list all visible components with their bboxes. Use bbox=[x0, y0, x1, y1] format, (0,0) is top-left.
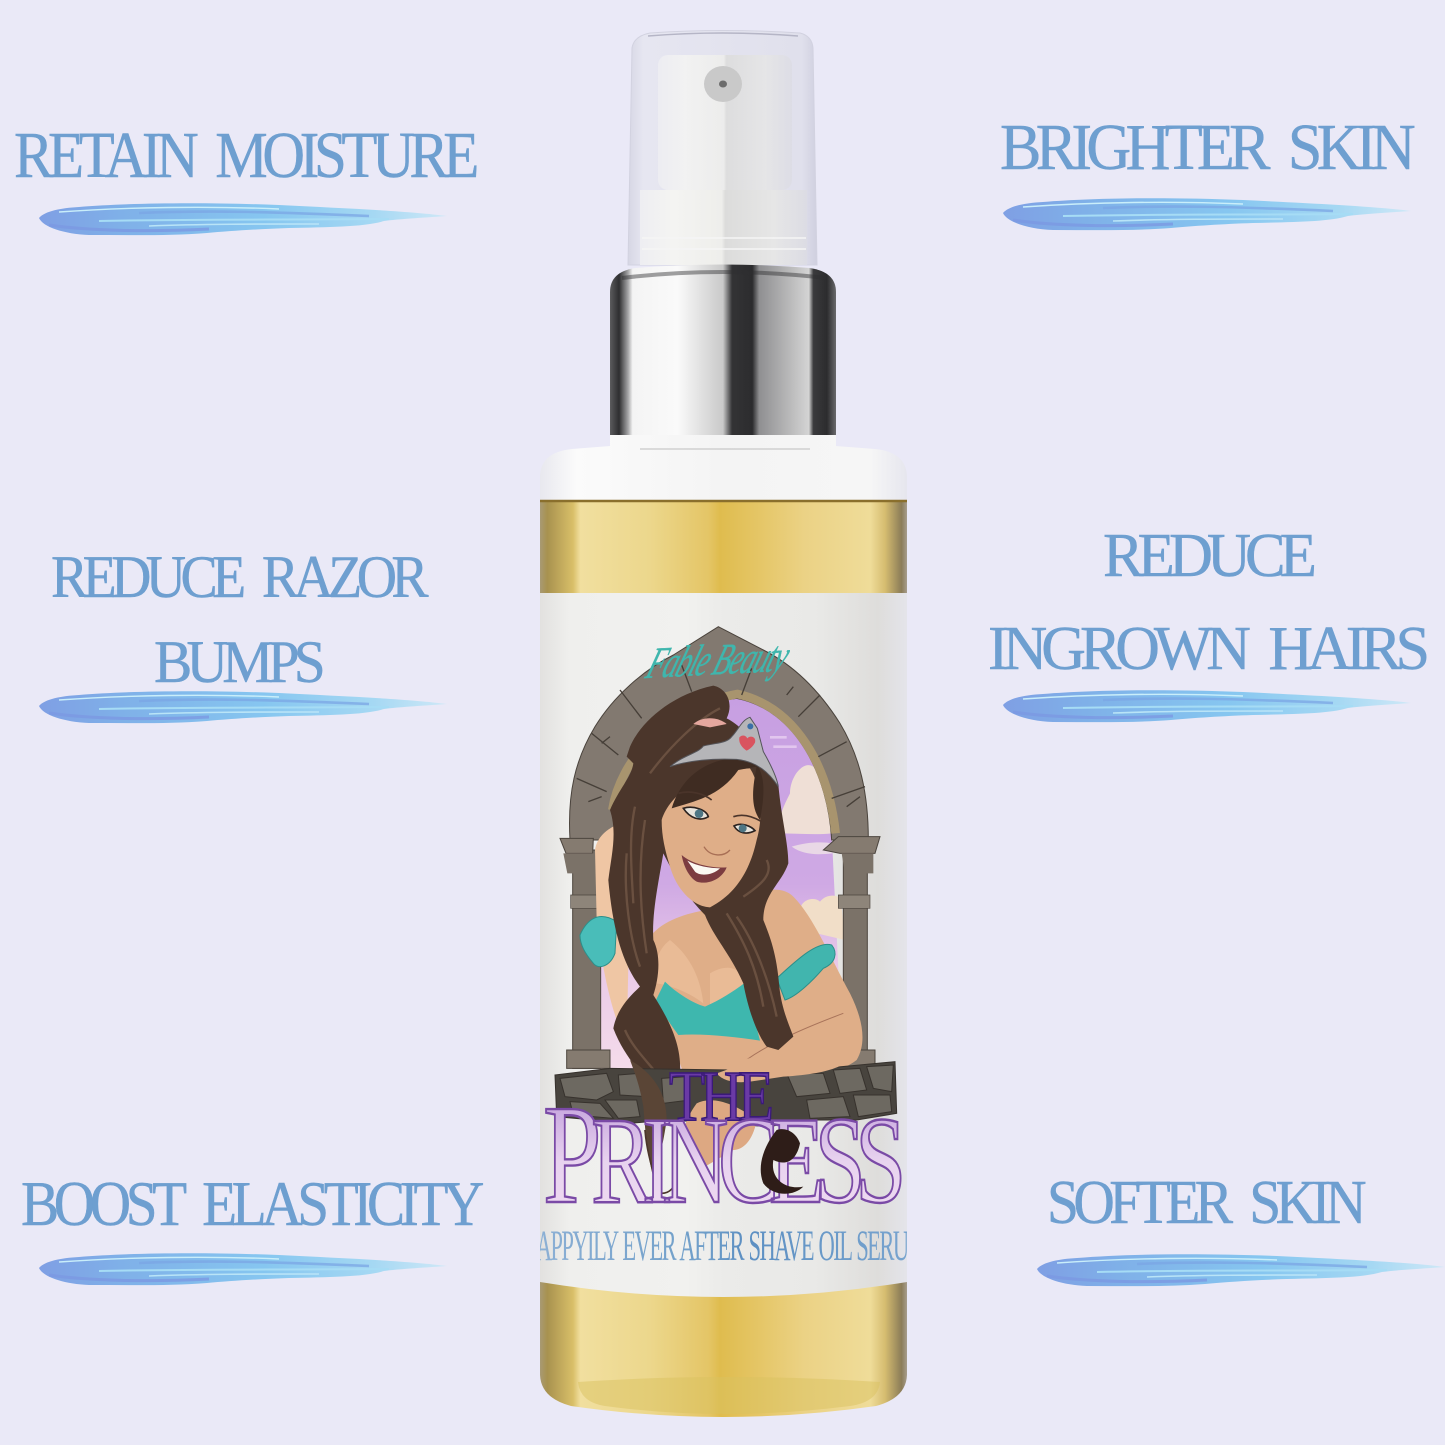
arm and hand bbox=[684, 1050, 857, 1167]
left pillar bbox=[560, 838, 610, 1068]
benefit: reduce razor bumps: REDUCE RAZOR bbox=[51, 544, 429, 610]
title: The: THE bbox=[669, 1056, 771, 1136]
hair wisp bbox=[645, 1130, 676, 1193]
tiara bbox=[670, 717, 778, 787]
title: Princess: PRINCESS bbox=[543, 1075, 901, 1233]
silver collar bbox=[610, 264, 836, 435]
arms and torso skin bbox=[595, 825, 862, 1079]
hair curl inside C bbox=[761, 1129, 803, 1194]
teal top and sleeves bbox=[580, 917, 835, 1041]
benefit: brighter skin: BRIGHTER SKIN bbox=[1000, 111, 1415, 184]
benefit: softer skin bbox=[1037, 1169, 1445, 1286]
arch stone joints bbox=[577, 665, 865, 807]
benefit: reduce ingrown hairs bbox=[988, 522, 1427, 722]
right pillar bbox=[823, 837, 880, 1068]
oil body bbox=[540, 500, 907, 1417]
stone wall bbox=[555, 1060, 897, 1180]
face bbox=[662, 758, 763, 907]
arch inner rim bbox=[612, 694, 836, 833]
princess illustration bbox=[555, 627, 897, 1193]
benefit: boost elasticity bbox=[21, 1168, 483, 1285]
eyes bbox=[678, 792, 762, 833]
label bbox=[540, 593, 907, 1297]
brand script: Fable Beauty: Fable Beauty bbox=[640, 631, 797, 688]
hair bbox=[608, 686, 793, 1100]
benefit: brighter skin bbox=[1000, 111, 1415, 230]
bottle shoulder bbox=[540, 435, 907, 502]
benefit: reduce razor bumps bbox=[39, 544, 447, 723]
window sky bbox=[598, 698, 845, 1070]
stone arch bbox=[569, 627, 868, 840]
benefit: retain moisture: RETAIN MOISTURE bbox=[14, 119, 477, 192]
benefit: reduce ingrown hairs: REDUCE bbox=[1103, 522, 1314, 590]
tagline: HAPPYILY EVER AFTER SHAVE OIL SERUM bbox=[521, 1223, 927, 1270]
benefit: reduce razor bumps: BUMPS bbox=[154, 629, 323, 695]
nose bbox=[704, 847, 730, 855]
benefit: retain moisture bbox=[14, 119, 477, 235]
spray bottle bbox=[540, 30, 907, 1417]
benefit: softer skin: SOFTER SKIN bbox=[1047, 1169, 1366, 1237]
benefit: reduce ingrown hairs: INGROWN HAIRS bbox=[988, 615, 1427, 683]
clear cap and pump bbox=[628, 30, 817, 265]
benefit: boost elasticity: BOOST ELASTICITY bbox=[21, 1168, 483, 1239]
smile bbox=[682, 855, 727, 883]
